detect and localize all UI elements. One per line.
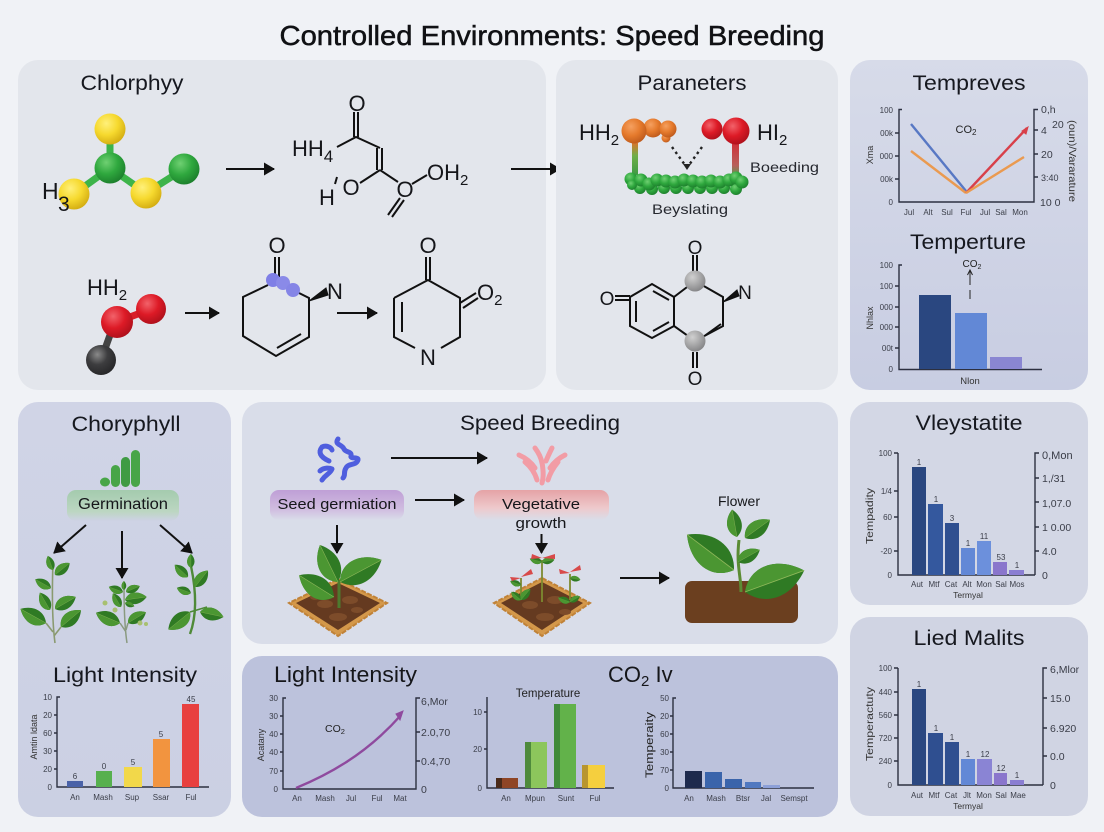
bar chart: Light Intensity: 10 [43, 693, 53, 702]
arrow [620, 577, 669, 579]
line chart: Tempreves: Ful [960, 208, 972, 217]
bar chart: Light Intensity: Amtin ldata [29, 714, 39, 760]
bar chart: Vleystatite: 1 [934, 495, 939, 504]
line chart: Light Intensity: 40 [269, 748, 279, 757]
panel: Choryphyll and Light Intensity [17, 402, 231, 817]
line chart: Light Intensity: 0 [274, 785, 279, 794]
line chart: Light Intensity: Acatany [256, 728, 266, 761]
bar chart: Temperture: 2 [978, 264, 982, 271]
molecule: fused rings: O [688, 369, 702, 390]
plant: right [164, 554, 225, 636]
bar chart: Lied Malits: 0.0 [1050, 751, 1065, 763]
bar chart: Temperature: An [501, 794, 511, 803]
molecule: green and yellow ball and stick: H [42, 178, 59, 204]
bar chart: Temperaity: Semspt [780, 794, 808, 803]
bar chart: Temperaity: 30 [660, 748, 670, 757]
arrow [336, 525, 338, 553]
diagram: bridged molecule: 2 [779, 132, 787, 149]
bar chart: Light Intensity: Ful [185, 793, 197, 802]
bar chart: Vleystatite: 0,Mon [1042, 450, 1073, 462]
diagram: bridged molecule [579, 118, 819, 217]
bar chart: Light Intensity [29, 693, 209, 802]
bar chart: Vleystatite: 1 [1015, 561, 1020, 570]
heading: Parameters: Paraneters [638, 72, 746, 95]
bar chart: Temperture: CO [963, 259, 978, 270]
molecule: ring with N and blue atoms [243, 233, 343, 356]
bar chart: Temperaity: 70 [660, 766, 670, 775]
bar chart: Vleystatite: 4.0 [1042, 546, 1057, 558]
heading: Vleystatite: Vleystatite [916, 412, 1022, 435]
bar chart: Vleystatite: Termyal [953, 590, 983, 600]
bar chart: Vleystatite: Cat [945, 580, 958, 589]
line chart: Tempreves: CO [956, 124, 972, 136]
molecule: fused rings: N [738, 283, 752, 304]
bar chart: Lied Malits: 15.0 [1050, 693, 1071, 705]
molecule: ring with O2 [394, 233, 502, 370]
diagram: bridged molecule: HI [757, 120, 779, 145]
heading: CO2 Iv: CO [608, 662, 641, 687]
bar chart: Vleystatite: 60 [883, 513, 893, 522]
line chart: Light Intensity [256, 694, 450, 803]
line chart: Tempreves: 2 [972, 128, 977, 137]
bar chart: Lied Malits: Temperactuty [865, 687, 876, 761]
line chart: Tempreves: 0,h [1041, 104, 1056, 116]
bar chart: Light Intensity: Sup [125, 793, 140, 802]
heading: Chlorphyy: Chlorphyy [80, 72, 184, 95]
molecule: green and yellow ball and stick: 3 [58, 193, 70, 216]
bar chart: Light Intensity: 20 [43, 711, 53, 720]
bar chart: Vleystatite: 0 [1042, 570, 1048, 582]
bar chart: Lied Malits: 1 [950, 733, 955, 742]
diagram: bridged molecule: Beyslating [652, 201, 728, 217]
molecule: green and yellow ball and stick [42, 114, 200, 216]
line chart: Tempreves: 3:40 [1041, 173, 1059, 183]
line chart: Light Intensity: 2.0,70 [421, 727, 450, 739]
line chart: Tempreves: 100 [880, 106, 894, 115]
heading: Choryphyll: Choryphyll [72, 413, 180, 436]
molecule: ring with O2: O [419, 233, 437, 258]
bar chart: Lied Malits: 100 [879, 664, 893, 673]
line chart: Light Intensity: 30 [269, 694, 279, 703]
bar chart: Lied Malits: 240 [879, 757, 893, 766]
bar chart: Vleystatite: Sal [995, 580, 1007, 589]
molecule: structural formula HH4: O [396, 177, 414, 202]
bar chart: Temperaity: Btsr [736, 794, 750, 803]
bar chart: Temperture: 0 [889, 365, 894, 374]
heading: Light Intensity: Light Intensity [53, 664, 198, 687]
bar chart: Light Intensity: 5 [159, 730, 164, 739]
icon: pink fan [519, 448, 565, 483]
arrow [511, 168, 560, 170]
molecule: structural formula HH4: 2 [460, 172, 468, 189]
bar chart: Temperture: 000 [880, 323, 894, 332]
bar chart: Temperture [865, 259, 1042, 387]
molecule: red and dark ball and stick [86, 275, 166, 375]
bar chart: Vleystatite: Mtf [928, 580, 940, 589]
label: Germination [67, 490, 179, 521]
bar chart: Lied Malits: Jlt [963, 791, 972, 800]
bar chart: Temperture: 00t [882, 344, 894, 353]
molecule: structural formula HH4: 4 [324, 147, 333, 166]
line chart: Tempreves: 20 [1041, 149, 1053, 161]
panel: Parameters [556, 60, 838, 390]
bar chart: Lied Malits: 720 [879, 734, 893, 743]
heading: Lied Malits: Lied Malits [914, 627, 1024, 650]
bar chart: Temperaity: 0 [665, 784, 670, 793]
bar chart: Lied Malits: Mtf [928, 791, 940, 800]
icon: blue squiggle [320, 439, 358, 480]
icon: growth bars [100, 450, 140, 487]
bar chart: Light Intensity: 0 [102, 762, 107, 771]
bar chart: Light Intensity: 60 [43, 729, 53, 738]
line chart: Light Intensity: Jul [346, 794, 356, 803]
line chart: Tempreves: 00k [880, 129, 894, 138]
bar chart: Vleystatite: 11 [980, 532, 989, 541]
bar chart: Light Intensity: 6 [73, 772, 78, 781]
line chart: Tempreves: (oun)/Vararature [1066, 120, 1077, 202]
bar chart: Lied Malits [865, 664, 1080, 811]
bar chart: Vleystatite: Mos [1009, 580, 1025, 589]
bar chart: Vleystatite: Aut [911, 580, 924, 589]
bar chart: Light Intensity: 0 [48, 783, 53, 792]
bar chart: Lied Malits: 0 [888, 781, 893, 790]
molecule: ring with O2: 2 [494, 292, 502, 309]
bar chart: Lied Malits: 12 [997, 764, 1006, 773]
bar chart: Temperaity: Jal [761, 794, 771, 803]
bar chart: Vleystatite: -20 [880, 547, 893, 556]
bar chart: Temperature: 0 [478, 784, 483, 793]
panel: Chlorphyy molecules [18, 60, 560, 390]
bar chart: Temperature: 10 [473, 708, 483, 717]
label: Germination: Germination [78, 496, 168, 513]
heading: CO2 Iv: Iv [649, 662, 673, 687]
molecule: fused rings [600, 238, 752, 390]
label: Seed germination: Seed germiation [278, 496, 396, 513]
line chart: Light Intensity: Mash [315, 794, 335, 803]
bar chart: Vleystatite: 1 0.00 [1042, 522, 1071, 534]
line chart: Light Intensity: Mat [393, 794, 407, 803]
bar chart: Lied Malits: 560 [879, 711, 893, 720]
diagram: bridged molecule: 2 [611, 132, 619, 149]
panel: Tempreves and Temperture charts [850, 60, 1088, 390]
molecule: structural formula HH4: H [319, 185, 335, 210]
bar chart: Temperture: 100 [880, 282, 894, 291]
bar chart: Lied Malits: 0 [1050, 780, 1056, 792]
bar chart: Light Intensity: 45 [187, 695, 196, 704]
heading: Tempreves: Tempreves [912, 72, 1026, 95]
bar chart: Vleystatite: Tempadity [865, 488, 876, 544]
bar chart: Temperture: 000 [880, 303, 894, 312]
line chart: Tempreves [865, 104, 1077, 217]
molecule: red and dark ball and stick: HH [87, 275, 119, 300]
bar chart: Light Intensity: 30 [43, 747, 53, 756]
molecule: ring with O2: N [420, 345, 436, 370]
bar chart: Lied Malits: 1 [1015, 771, 1020, 780]
label: Vegetative growth: growth [516, 515, 566, 532]
line chart: Tempreves: Sul [941, 208, 953, 217]
title: Controlled Environments: Speed Breeding [280, 20, 824, 51]
line chart: Tempreves: 00k [880, 175, 894, 184]
bar chart: Vleystatite: 100 [879, 449, 893, 458]
plant: left [17, 555, 85, 643]
arrow [185, 312, 219, 314]
bar chart: Temperature: Temperature [516, 688, 580, 700]
molecule: structural formula HH4 [292, 91, 468, 217]
bar chart: Lied Malits: 6.920 [1050, 723, 1076, 735]
bar chart: Vleystatite: 1/4 [881, 487, 893, 496]
bar chart: Vleystatite: Mon [976, 580, 992, 589]
molecule: fused rings: O [600, 289, 614, 310]
illustration: potted plant [677, 508, 810, 623]
bar chart: Temperaity: An [684, 794, 694, 803]
line chart: Tempreves: Sal [995, 208, 1007, 217]
bar chart: Lied Malits: 12 [981, 750, 990, 759]
arrow [337, 312, 377, 314]
line chart: Light Intensity: 30 [269, 712, 279, 721]
bar chart: Vleystatite: 1,/31 [1042, 473, 1066, 485]
arrow [391, 457, 487, 459]
line chart: Light Intensity: 40 [269, 730, 279, 739]
bar chart: Vleystatite [865, 449, 1073, 600]
bar chart: Lied Malits: Termyal [953, 801, 983, 811]
heading: Light Intensity: Light Intensity [274, 662, 417, 687]
bar chart: Vleystatite: 53 [997, 553, 1006, 562]
molecule: structural formula HH4: HH [292, 136, 324, 161]
bar chart: Vleystatite: 1 [966, 539, 971, 548]
bar chart: Temperaity: 20 [660, 712, 670, 721]
arrows to plants [54, 525, 192, 578]
bar chart: Vleystatite: 1,07.0 [1042, 498, 1071, 510]
label: Flower: Flower [718, 493, 760, 509]
molecule: ring with O2: O [477, 280, 494, 305]
plant: middle [93, 581, 149, 643]
bar chart: Temperature: Sunt [558, 794, 575, 803]
molecule: ring with N and blue atoms: N [327, 279, 343, 304]
bar chart: Light Intensity: An [70, 793, 80, 802]
bar chart: Temperature [473, 688, 614, 803]
bar chart: Temperaity: 50 [660, 694, 670, 703]
panel: Light Intensity and CO2 charts [242, 656, 838, 817]
molecule: ring with N and blue atoms: O [268, 233, 286, 258]
bar chart: Lied Malits: Sal [995, 791, 1007, 800]
bar chart: Lied Malits: Cat [945, 791, 958, 800]
panel: Vleystatite chart [850, 402, 1088, 605]
line chart: Tempreves: Jul [904, 208, 914, 217]
bar chart: Temperaity [644, 694, 814, 803]
heading: Temperture: Temperture [910, 231, 1026, 254]
panel: Speed Breeding [242, 402, 838, 644]
bar chart: Temperture: Nlon [960, 376, 980, 387]
illustration: seedling in soil bed [289, 541, 387, 636]
bar chart: Light Intensity: Mash [93, 793, 113, 802]
molecule: red and dark ball and stick: 2 [119, 287, 127, 304]
bar chart: Temperaity: Temperaity [644, 711, 656, 778]
line chart: Light Intensity: Ful [371, 794, 383, 803]
bar chart: Lied Malits: Aut [911, 791, 924, 800]
line chart: Tempreves: 4 [1041, 125, 1047, 137]
illustration: sprouts with red flowers [494, 554, 590, 636]
line chart: Light Intensity: 6,Mor [421, 696, 448, 708]
bar chart: Lied Malits: Mon [976, 791, 992, 800]
bar chart: Light Intensity: 5 [131, 758, 136, 767]
arrow [540, 534, 542, 553]
molecule: structural formula HH4: O [342, 175, 360, 200]
molecule: structural formula HH4: O [348, 91, 366, 116]
panel: Lied Malits chart [850, 617, 1088, 816]
heading: Speed Breeding: Speed Breeding [460, 412, 620, 435]
label: Vegetative growth: Vegetative [502, 496, 580, 513]
line chart: Tempreves: 20 [1052, 119, 1064, 131]
molecule: fused rings: O [688, 238, 702, 259]
arrow [415, 499, 464, 501]
line chart: Tempreves: Xma [865, 146, 875, 164]
bar chart: Vleystatite: 3 [950, 514, 955, 523]
bar chart: Temperature: 20 [473, 745, 483, 754]
line chart: Tempreves: 10 0 [1040, 197, 1061, 209]
line chart: Light Intensity: 0.4,70 [421, 756, 450, 768]
bar chart: Lied Malits: Mae [1010, 791, 1026, 800]
bar chart: Lied Malits: 1 [966, 750, 971, 759]
bar chart: Light Intensity: Ssar [153, 793, 170, 802]
bar chart: Lied Malits: 1 [934, 724, 939, 733]
bar chart: Lied Malits: 440 [879, 688, 893, 697]
bar chart: Vleystatite: 0 [888, 571, 893, 580]
line chart: Light Intensity: 0 [421, 784, 427, 796]
diagram: bridged molecule: HH [579, 120, 611, 145]
bar chart: Temperaity: 60 [660, 730, 670, 739]
arrow [226, 168, 274, 170]
label: Seed germination [270, 490, 404, 520]
line chart: Light Intensity: CO [325, 723, 341, 735]
line chart: Tempreves: Mon [1012, 208, 1028, 217]
line chart: Light Intensity: An [292, 794, 302, 803]
bar chart: Vleystatite: Alt [962, 580, 972, 589]
bar chart: Temperature: Ful [589, 794, 601, 803]
diagram: bridged molecule: Boeeding [750, 159, 819, 175]
bar chart: Light Intensity: 20 [43, 765, 53, 774]
line chart: Tempreves: Alt [923, 208, 933, 217]
heading: CO2 Iv: 2 [641, 673, 649, 690]
line chart: Tempreves: 0 [889, 198, 894, 207]
bar chart: Lied Malits: 6,Mlor [1050, 664, 1080, 676]
line chart: Light Intensity: 2 [341, 727, 345, 736]
line chart: Tempreves: 000 [880, 152, 894, 161]
bar chart: Temperture: 100 [880, 261, 894, 270]
line chart: Light Intensity: 70 [269, 767, 279, 776]
label: Vegetative growth [474, 490, 609, 532]
bar chart: Temperture: Nhlax [865, 306, 875, 330]
bar chart: Temperaity: Mash [706, 794, 726, 803]
bar chart: Temperature: Mpun [525, 794, 545, 803]
bar chart: Vleystatite: 1 [917, 458, 922, 467]
molecule: structural formula HH4: OH [427, 160, 460, 185]
bar chart: Lied Malits: 1 [917, 680, 922, 689]
line chart: Tempreves: Jul [980, 208, 990, 217]
